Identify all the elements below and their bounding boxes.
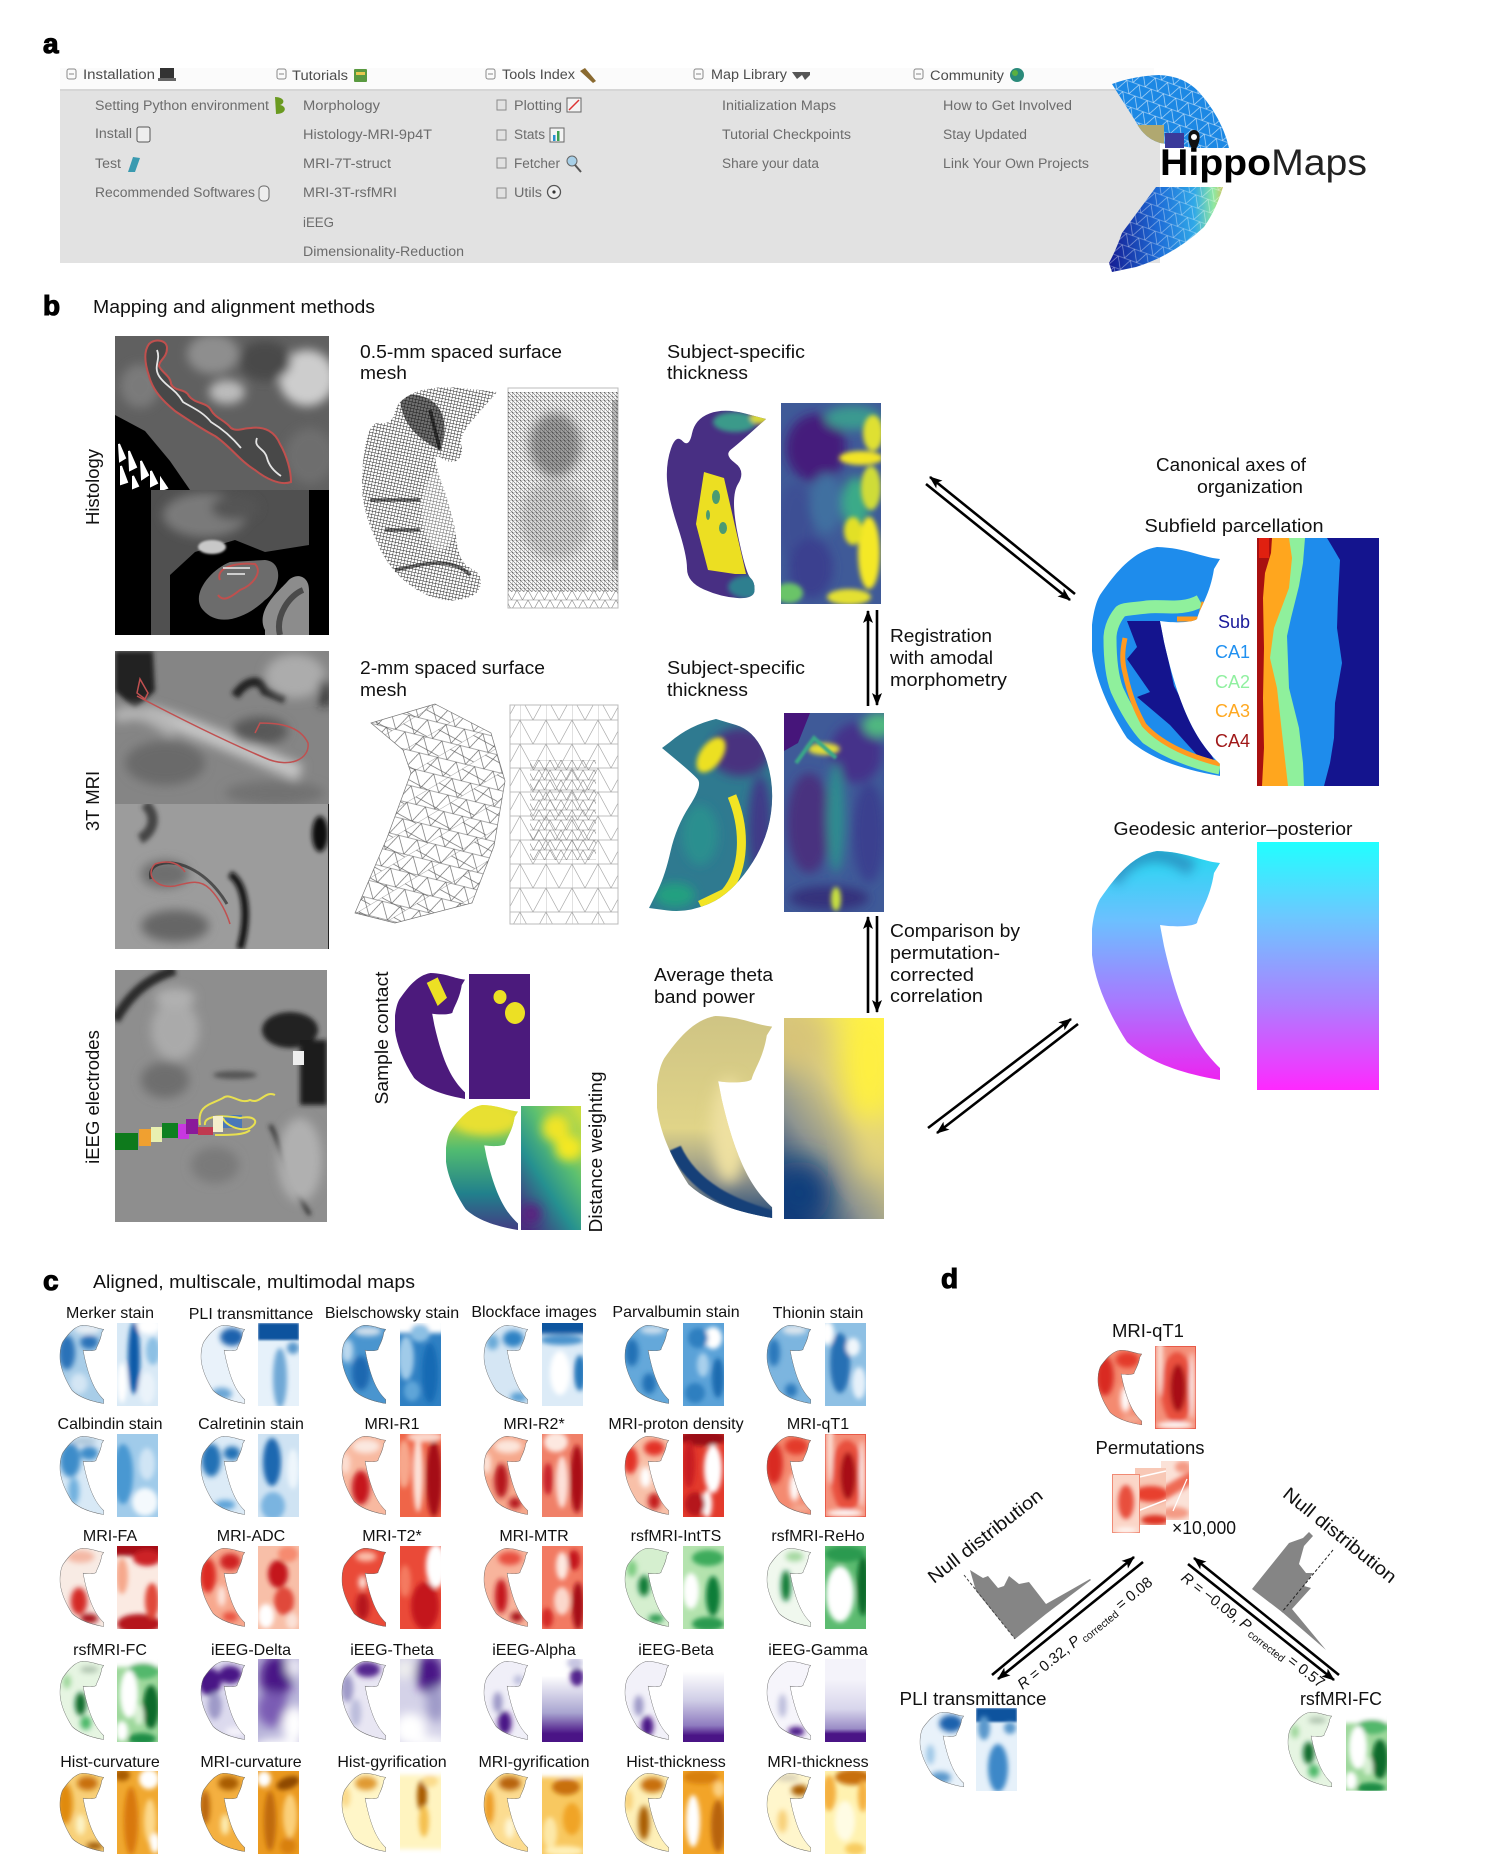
panel a: documentation navigation menu bbox=[60, 67, 1160, 263]
statistic: PLI correlation: R = 0.32, P bbox=[1014, 1632, 1084, 1693]
text: registration with amodal morphometry: Registration bbox=[890, 625, 992, 646]
map: MRI-thickness: MRI-thickness bbox=[767, 1754, 869, 1771]
arrows: from theta power to canonical axes bbox=[928, 1019, 1078, 1133]
label: 0.5-mm spaced surface mesh: mesh bbox=[360, 362, 407, 383]
map: MRI-proton density: MRI-proton density bbox=[608, 1416, 744, 1433]
map: Thionin stain bbox=[767, 1305, 866, 1406]
map: MRI-ADC bbox=[200, 1528, 299, 1629]
map: Calretinin stain bbox=[198, 1416, 304, 1520]
flat map: thickness MRI bbox=[784, 713, 884, 912]
menu column: Tutorials: MRI-7T-struct bbox=[303, 156, 391, 171]
text: comparison by permutation-corrected correlation: correlation bbox=[890, 985, 983, 1006]
surface: geodesic anterior-posterior bbox=[1092, 851, 1222, 1083]
HippoMaps logo: HippoMaps bbox=[1160, 142, 1367, 183]
map: PLI transmittance: PLI transmittance bbox=[189, 1306, 313, 1323]
map: PLI transmittance comparison: PLI transmittance bbox=[900, 1688, 1046, 1709]
label: average theta band power: Average theta bbox=[654, 964, 774, 985]
0.5-mm surface mesh bbox=[362, 387, 496, 600]
text: registration with amodal morphometry: morphometry bbox=[890, 669, 1008, 690]
panel letter b: b bbox=[43, 290, 60, 321]
histogram: null distribution rsfMRI-FC bbox=[1252, 1532, 1333, 1650]
label: subject-specific thickness (histology): Subject-specific bbox=[667, 341, 805, 362]
map: Parvalbumin stain bbox=[612, 1304, 740, 1406]
menu column: Installation: Install bbox=[95, 126, 132, 141]
subfield legend: CA3 bbox=[1215, 701, 1250, 721]
map: MRI-R2*: MRI-R2* bbox=[503, 1416, 565, 1433]
text: registration with amodal morphometry: with amodal bbox=[889, 647, 993, 668]
map: MRI-T2*: MRI-T2* bbox=[362, 1528, 422, 1545]
label: sample contact: Sample contact bbox=[371, 972, 392, 1104]
map: iEEG-Gamma: iEEG-Gamma bbox=[768, 1642, 868, 1659]
permuted surrogate maps bbox=[1112, 1461, 1194, 1533]
map: iEEG-Beta bbox=[625, 1642, 724, 1742]
histogram: null distribution PLI bbox=[964, 1570, 1091, 1639]
heading: geodesic anterior-posterior: Geodesic anterior–posterior bbox=[1114, 818, 1352, 839]
map: MRI-gyrification: MRI-gyrification bbox=[478, 1754, 590, 1771]
flat map: average theta band power bbox=[784, 1018, 884, 1219]
label: subject-specific thickness (histology): thickness bbox=[667, 362, 748, 383]
multiplier: times 10,000: ×10,000 bbox=[1172, 1518, 1236, 1538]
menu column: Map Library: Map Library bbox=[711, 67, 787, 82]
map: PLI transmittance bbox=[189, 1306, 313, 1408]
heading: canonical axes of organization: Canonical axes of bbox=[1156, 454, 1307, 475]
map: Hist-thickness: Hist-thickness bbox=[626, 1754, 726, 1771]
menu column: Tutorials: iEEG bbox=[303, 215, 334, 230]
map: Bielschowsky stain: Bielschowsky stain bbox=[325, 1305, 459, 1322]
menu column: Tools Index: Plotting bbox=[514, 98, 562, 113]
menu column: Installation bbox=[67, 67, 285, 201]
map: Parvalbumin stain: Parvalbumin stain bbox=[612, 1304, 740, 1321]
HippoMaps logo bbox=[1104, 70, 1367, 275]
map: MRI-R2* bbox=[483, 1416, 584, 1517]
panel d: MRI-qT1 reference map bbox=[1096, 1316, 1196, 1429]
menu column: Tutorials: Morphology bbox=[303, 98, 380, 113]
map: Merker stain bbox=[59, 1305, 161, 1406]
map: Hist-gyrification: Hist-gyrification bbox=[337, 1754, 447, 1771]
menu column: Tools Index: Fetcher bbox=[514, 156, 560, 171]
map: Hist-thickness bbox=[624, 1754, 726, 1854]
heading: mapping and alignment methods: Mapping and alignment methods bbox=[93, 296, 375, 317]
menu column: Installation: Recommended Softwares bbox=[95, 185, 255, 200]
label: subject-specific thickness (MRI): thickness bbox=[667, 679, 748, 700]
map: iEEG-Delta: iEEG-Delta bbox=[211, 1642, 291, 1659]
panel d: MRI-qT1 reference map: MRI-qT1 bbox=[1112, 1320, 1184, 1341]
map: rsfMRI-ReHo: rsfMRI-ReHo bbox=[771, 1528, 865, 1545]
arrows: qT1 to PLI transmittance bbox=[992, 1557, 1143, 1679]
map: iEEG-Alpha: iEEG-Alpha bbox=[492, 1642, 576, 1659]
map: rsfMRI-IntTS: rsfMRI-IntTS bbox=[631, 1528, 721, 1545]
map: MRI-ADC: MRI-ADC bbox=[217, 1528, 285, 1545]
menu column: Tutorials: Histology-MRI-9p4T bbox=[303, 127, 432, 142]
panel c: map grid bbox=[58, 1304, 871, 1859]
menu column: Community bbox=[914, 68, 1089, 171]
map: rsfMRI-FC bbox=[60, 1642, 162, 1745]
arrows: from thickness to canonical axes bbox=[926, 477, 1075, 600]
subfield legend: CA4 bbox=[1215, 731, 1250, 751]
map: MRI-FA: MRI-FA bbox=[83, 1528, 137, 1545]
map: rsfMRI-FC comparison: rsfMRI-FC bbox=[1300, 1688, 1382, 1709]
menu column: Installation: Test bbox=[95, 156, 121, 171]
map: Bielschowsky stain bbox=[325, 1305, 459, 1406]
map: MRI-FA bbox=[60, 1530, 158, 1629]
text: comparison by permutation-corrected correlation: corrected bbox=[890, 964, 974, 985]
map: Calbindin stain bbox=[58, 1416, 162, 1517]
flat map: geodesic anterior-posterior bbox=[1257, 842, 1379, 1090]
map: MRI-qT1 bbox=[766, 1418, 866, 1517]
image: iEEG electrode placement on MRI bbox=[115, 970, 327, 1222]
label: null distribution left: Null distribution bbox=[923, 1485, 1047, 1587]
flat map: thickness histology bbox=[781, 403, 881, 604]
surface: average theta band power bbox=[657, 1016, 774, 1221]
text: comparison by permutation-corrected correlation: permutation- bbox=[890, 942, 1000, 963]
map: iEEG-Delta bbox=[200, 1644, 299, 1742]
map: MRI-gyrification bbox=[478, 1754, 590, 1856]
menu column: Tools Index: Utils bbox=[514, 185, 542, 200]
map: MRI-R1 bbox=[341, 1416, 443, 1517]
menu column: Map Library: Tutorial Checkpoints bbox=[722, 127, 851, 142]
image: MRI coronal slice bbox=[115, 804, 329, 949]
permutations label: Permutations bbox=[1096, 1437, 1204, 1458]
map: Calbindin stain: Calbindin stain bbox=[58, 1416, 162, 1433]
map: Hist-gyrification bbox=[337, 1754, 447, 1859]
menu column: Tutorials: MRI-3T-rsfMRI bbox=[303, 185, 397, 200]
menu column: Community: How to Get Involved bbox=[943, 98, 1072, 113]
map: MRI-curvature: MRI-curvature bbox=[200, 1754, 302, 1771]
statistic: rsfMRI-FC correlation: corrected bbox=[1243, 1627, 1287, 1665]
map: Calretinin stain: Calretinin stain bbox=[198, 1416, 304, 1433]
menu column: Community: Community bbox=[930, 68, 1004, 83]
flat map: subfield parcellation bbox=[1257, 538, 1379, 786]
image: histology sagittal section bbox=[115, 336, 329, 490]
label: 2-mm spaced surface mesh: mesh bbox=[360, 679, 407, 700]
menu column: Map Library bbox=[694, 67, 851, 171]
0.5-mm flat mesh bbox=[508, 388, 618, 608]
flat map: sample contact bbox=[469, 974, 530, 1099]
row label: Histology: Histology bbox=[82, 448, 103, 525]
surface: distance weighting bbox=[446, 1102, 519, 1232]
label: subject-specific thickness (MRI): Subject-specific bbox=[667, 657, 805, 678]
menu column: Community: Link Your Own Projects bbox=[943, 156, 1089, 171]
subfield legend: CA2 bbox=[1215, 672, 1250, 692]
map: MRI-thickness bbox=[767, 1754, 871, 1855]
map: Blockface images: Blockface images bbox=[471, 1304, 597, 1321]
map: iEEG-Gamma bbox=[767, 1642, 868, 1742]
label: 2-mm spaced surface mesh: 2-mm spaced surface bbox=[360, 657, 545, 678]
label: average theta band power: band power bbox=[654, 986, 755, 1007]
map: rsfMRI-ReHo bbox=[767, 1528, 869, 1629]
subfield legend: CA1 bbox=[1215, 642, 1250, 662]
row label: iEEG electrodes: iEEG electrodes bbox=[82, 1030, 103, 1164]
label: distance weighting: Distance weighting bbox=[585, 1072, 606, 1232]
panel letter c: c bbox=[43, 1265, 59, 1296]
image: MRI sagittal slice bbox=[115, 651, 329, 804]
menu column: Installation: Installation bbox=[83, 67, 155, 82]
menu column: Map Library: Share your data bbox=[722, 156, 819, 171]
arrows: qT1 to rsfMRI-FC bbox=[1188, 1558, 1339, 1680]
row label: 3T MRI: 3T MRI bbox=[82, 771, 103, 831]
panel letter d: d bbox=[941, 1263, 958, 1294]
map: rsfMRI-FC: rsfMRI-FC bbox=[73, 1642, 147, 1659]
heading: aligned multiscale multimodal maps: Aligned, multiscale, multimodal maps bbox=[93, 1271, 415, 1292]
surface: sample contact bbox=[395, 973, 466, 1101]
map: iEEG-Theta bbox=[342, 1644, 441, 1742]
subfield legend: Sub bbox=[1218, 612, 1250, 632]
label: 0.5-mm spaced surface mesh: 0.5-mm spaced surface bbox=[360, 341, 562, 362]
surface: thickness MRI bbox=[649, 719, 772, 911]
menu column: Tools Index: Stats bbox=[514, 127, 545, 142]
menu column: Tools Index bbox=[486, 67, 596, 200]
map: iEEG-Theta: iEEG-Theta bbox=[350, 1642, 434, 1659]
map: Hist-curvature bbox=[58, 1754, 160, 1855]
map: MRI-MTR bbox=[484, 1528, 584, 1630]
subfield legend bbox=[1215, 612, 1250, 751]
image: histology coronal section bbox=[115, 490, 329, 635]
menu column: Community: Stay Updated bbox=[943, 127, 1027, 142]
arrows: comparison bbox=[868, 916, 877, 1013]
heading: canonical axes of organization: organization bbox=[1197, 476, 1303, 497]
arrows: registration between histology and MRI bbox=[868, 610, 877, 706]
map: PLI transmittance comparison bbox=[900, 1688, 1046, 1792]
menu column: Map Library: Initialization Maps bbox=[722, 98, 836, 113]
map: MRI-proton density bbox=[608, 1416, 744, 1518]
statistic: rsfMRI-FC correlation: = 0.57 bbox=[1281, 1650, 1328, 1692]
heading: subfield parcellation: Subfield parcellation bbox=[1144, 515, 1324, 536]
map: rsfMRI-FC comparison bbox=[1288, 1688, 1391, 1793]
statistic: PLI correlation: = 0.08 bbox=[1109, 1574, 1156, 1616]
surface: thickness histology bbox=[666, 410, 766, 598]
map: iEEG-Beta: iEEG-Beta bbox=[638, 1642, 714, 1659]
label: null distribution right: Null distribution bbox=[1279, 1483, 1401, 1587]
map: Blockface images bbox=[471, 1304, 597, 1406]
menu column: Tutorials bbox=[277, 68, 464, 259]
map: iEEG-Alpha bbox=[484, 1642, 584, 1742]
map: MRI-T2* bbox=[342, 1528, 446, 1630]
menu column: Tools Index: Tools Index bbox=[502, 67, 575, 82]
statistic: rsfMRI-FC correlation: R = −0.09, P bbox=[1178, 1569, 1255, 1634]
map: rsfMRI-IntTS bbox=[625, 1528, 724, 1631]
menu column: Tutorials: Tutorials bbox=[292, 68, 348, 83]
statistic: PLI correlation: corrected bbox=[1077, 1608, 1121, 1647]
map: Merker stain: Merker stain bbox=[66, 1305, 154, 1322]
surface: subfield parcellation bbox=[1092, 547, 1222, 779]
text: comparison by permutation-corrected correlation: Comparison by bbox=[890, 920, 1021, 941]
flat map: distance weighting bbox=[521, 1106, 581, 1230]
map: MRI-MTR: MRI-MTR bbox=[499, 1528, 569, 1545]
map: MRI-qT1: MRI-qT1 bbox=[787, 1416, 849, 1433]
panel letter a: a bbox=[43, 28, 59, 59]
menu column: Installation: Setting Python environment bbox=[95, 98, 269, 113]
menu column: Tutorials: Dimensionality-Reduction bbox=[303, 244, 464, 259]
2-mm surface mesh bbox=[355, 704, 505, 923]
map: MRI-curvature bbox=[200, 1754, 302, 1854]
map: Hist-curvature: Hist-curvature bbox=[60, 1754, 160, 1771]
map: Thionin stain: Thionin stain bbox=[773, 1305, 863, 1322]
2-mm flat mesh bbox=[510, 705, 618, 924]
map: MRI-R1: MRI-R1 bbox=[364, 1416, 420, 1433]
